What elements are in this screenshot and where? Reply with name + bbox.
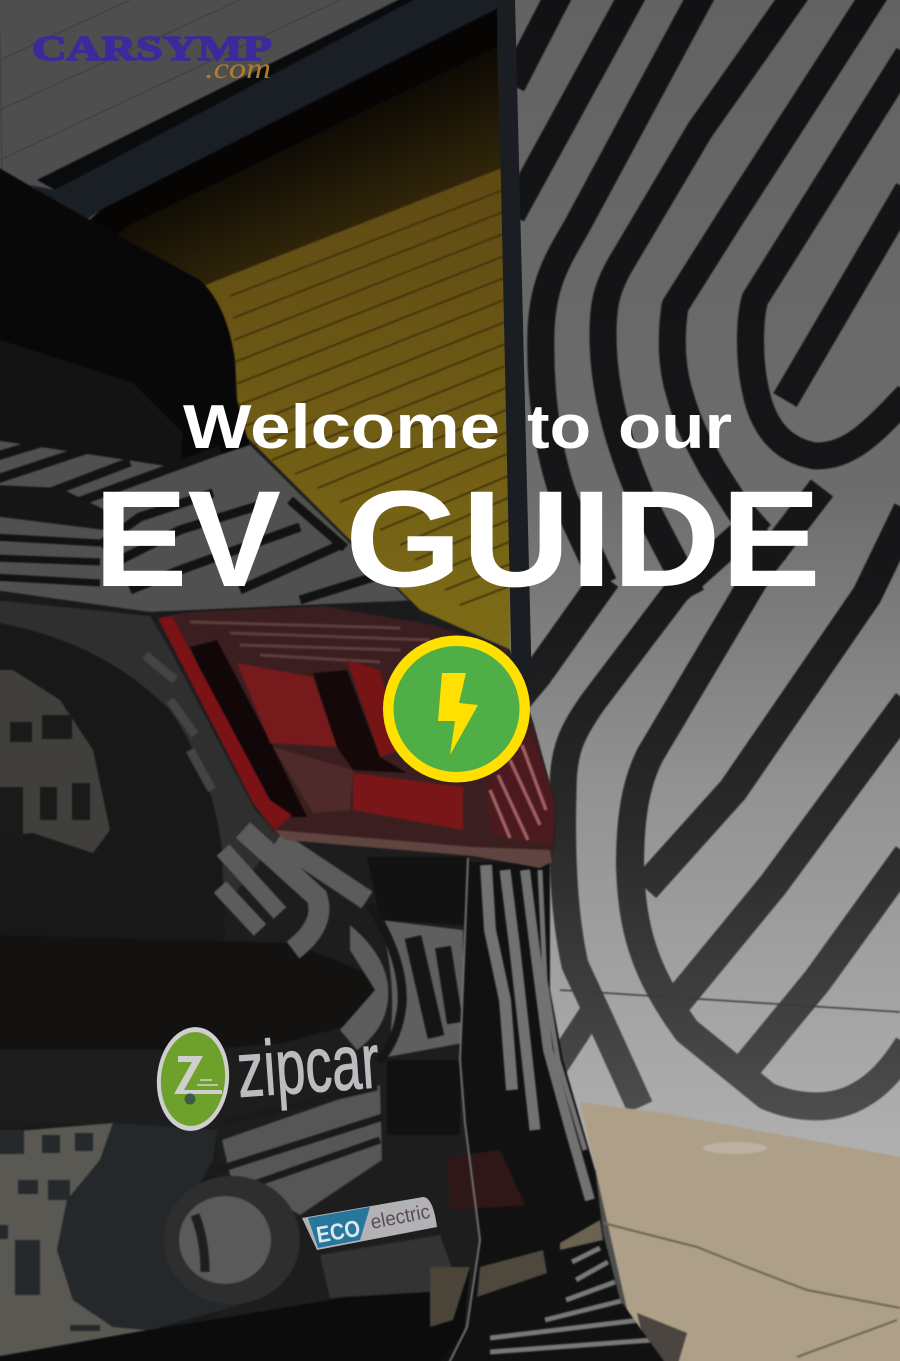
title line 2 — [94, 463, 821, 616]
title — [94, 393, 821, 616]
dark arc reflection — [0, 622, 225, 950]
zipcar wordmark: zipcar — [234, 1016, 382, 1114]
lower-left building reflection — [0, 1120, 247, 1361]
rear quarter stripes — [430, 862, 668, 1361]
title line 2: GUIDE — [345, 463, 821, 616]
yellow garage door — [30, 0, 512, 650]
painted striped wall — [510, 0, 900, 1170]
pavement — [580, 1102, 900, 1361]
logo domain: .com — [205, 52, 271, 85]
zipcar logo — [153, 1016, 382, 1134]
title line 1: our — [618, 393, 732, 462]
ECO electric badge: ECO — [314, 1215, 362, 1248]
rear window reflections — [0, 440, 420, 620]
zipcar badge — [153, 1024, 233, 1134]
title line 1 — [183, 393, 732, 462]
wheel-like reflection — [164, 1176, 300, 1304]
title line 1: to — [527, 393, 591, 462]
building reflection — [0, 670, 110, 853]
zebra reflections on body — [220, 830, 467, 1135]
door seam — [447, 858, 480, 1361]
upper body panel — [0, 600, 280, 892]
door pillar — [497, 0, 532, 690]
tail light — [158, 606, 555, 868]
reflected stripes below zipcar — [217, 1085, 383, 1215]
spoiler — [0, 165, 250, 468]
logo wordmark: CARSYMP — [32, 29, 272, 68]
title line 2: EV — [94, 463, 281, 616]
ECO electric badge — [302, 1197, 437, 1250]
icon: lightning bolt badge — [383, 636, 530, 782]
lower door shadow — [0, 1270, 470, 1361]
car — [0, 165, 668, 1361]
title line 1: Welcome — [183, 393, 500, 462]
ECO electric badge: electric — [369, 1201, 432, 1234]
logo: CARSYMP.com — [32, 29, 272, 85]
dark lower body shadow — [0, 935, 377, 1050]
